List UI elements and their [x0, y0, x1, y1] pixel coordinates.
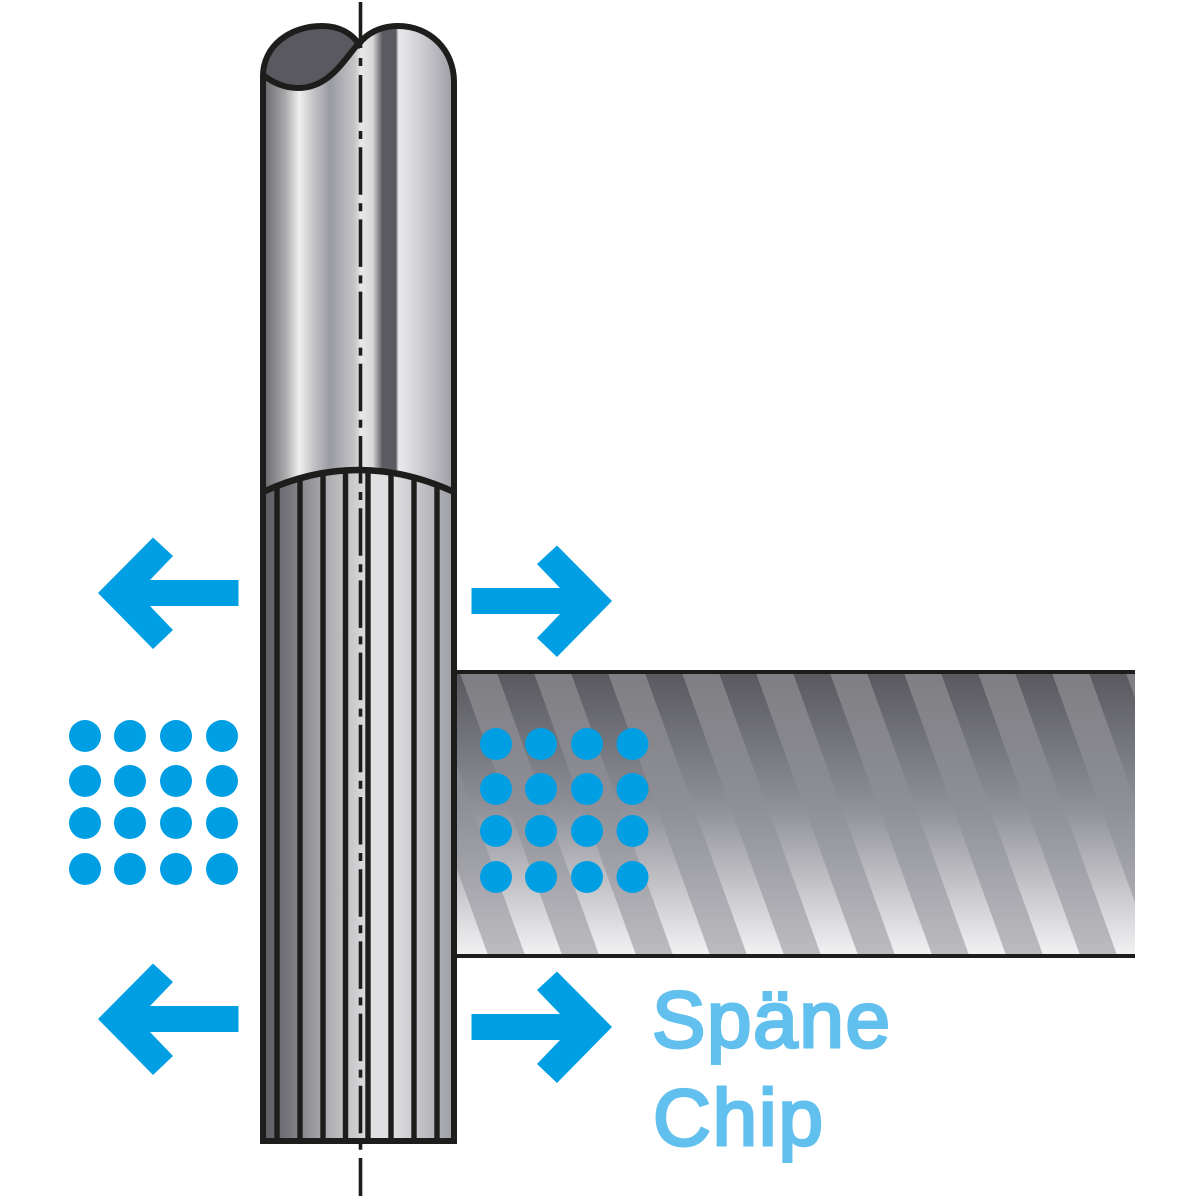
arrow: upper right — [472, 546, 612, 657]
label: Späne: Späne — [652, 975, 890, 1064]
chip dots: left — [69, 720, 238, 885]
tool fluted cutting section — [260, 470, 457, 1141]
arrow: lower right — [472, 972, 612, 1083]
workpiece — [456, 670, 1135, 958]
tool shank — [263, 26, 454, 490]
chip dots: right — [480, 728, 648, 893]
shank outline — [263, 26, 454, 490]
centre line — [359, 2, 362, 1196]
arrow: lower left — [98, 964, 238, 1075]
label: Chip: Chip — [653, 1073, 823, 1162]
arrow: upper left — [98, 538, 238, 649]
shank cut face — [263, 26, 359, 88]
